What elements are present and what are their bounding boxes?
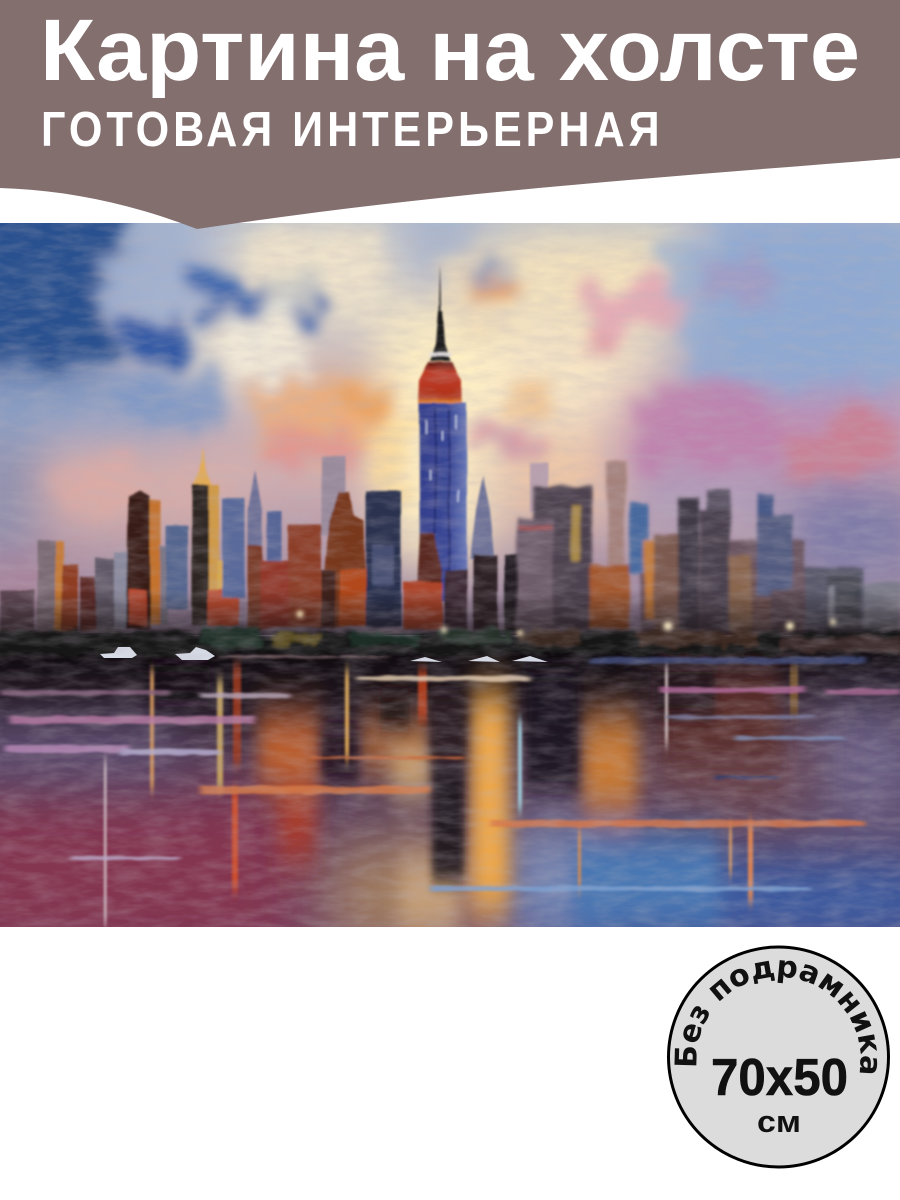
sky background	[0, 223, 900, 643]
building foot shade	[0, 590, 900, 635]
horizontal brush strokes	[0, 655, 900, 891]
boats	[100, 647, 548, 662]
badge size: 70x50	[711, 1049, 848, 1107]
water background	[0, 648, 900, 927]
badge	[667, 946, 890, 1168]
water vertical reflections	[258, 670, 780, 930]
water colour fields	[0, 700, 900, 960]
badge arc text: Без подрамника	[674, 960, 878, 1074]
canvas grain	[0, 223, 900, 927]
skyline	[0, 262, 548, 632]
hazy background buildings	[0, 456, 548, 632]
title: Картина на холсте	[40, 2, 860, 99]
window lights	[296, 610, 836, 636]
panel: painting	[0, 190, 900, 960]
brushed clouds	[0, 223, 900, 513]
vertical light streaks	[104, 665, 798, 925]
badge circle	[668, 947, 888, 1167]
left buildings	[37, 447, 401, 631]
sky colour fields	[0, 200, 900, 600]
subtitle: ГОТОВАЯ ИНТЕРЬЕРНАЯ	[41, 101, 660, 157]
header banner	[0, 0, 900, 229]
dark reflections	[150, 665, 715, 880]
empire state tower	[419, 262, 467, 600]
badge unit: см	[757, 1104, 801, 1139]
right skyline	[517, 461, 900, 643]
shoreline	[0, 628, 900, 654]
centre buildings	[403, 475, 520, 630]
